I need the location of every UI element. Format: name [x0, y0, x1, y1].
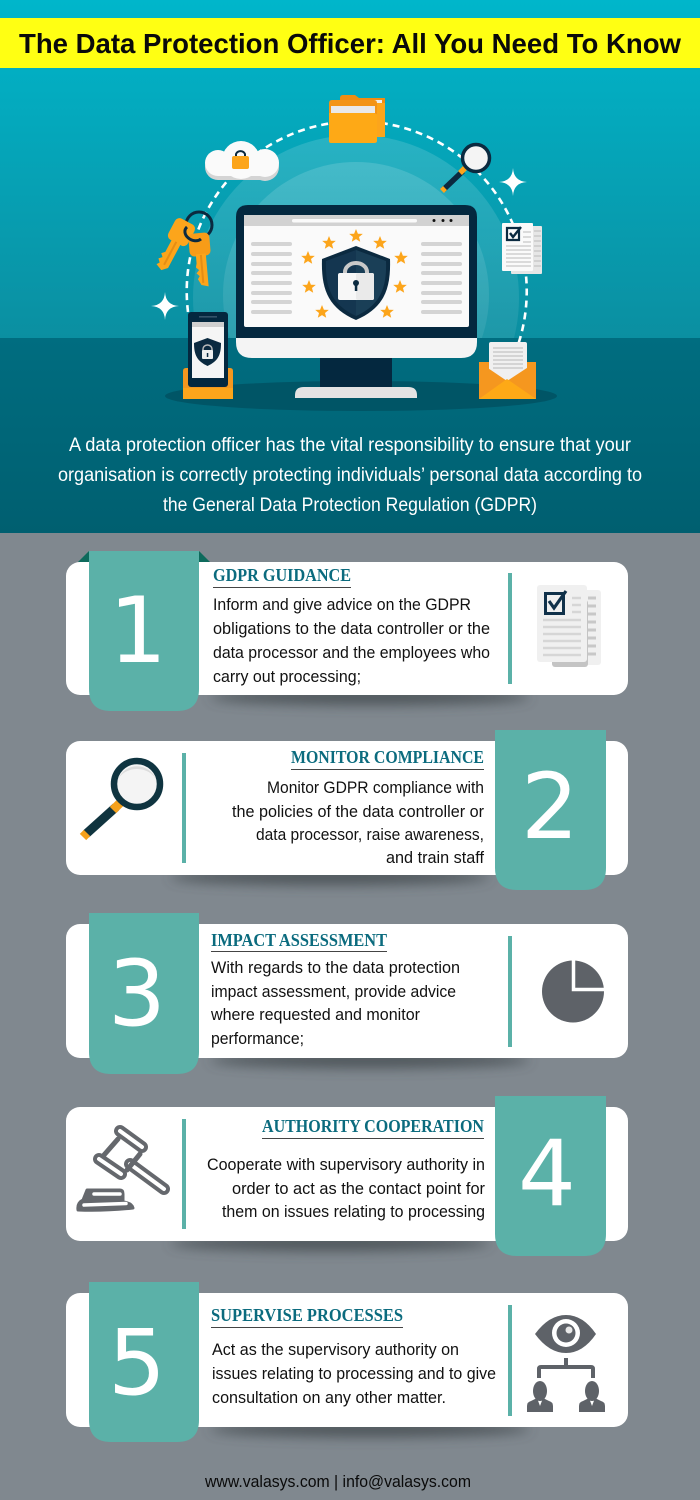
body text: data processor and the employees who — [213, 643, 490, 662]
number ribbon 2 — [495, 730, 606, 890]
icon: cloud with lock — [205, 141, 279, 181]
body text: Inform and give advice on the GDPR — [213, 595, 471, 614]
body text: Act as the supervisory authority on — [212, 1340, 459, 1359]
body text: consultation on any other matter. — [212, 1388, 446, 1407]
heading: IMPACT ASSESSMENT — [211, 930, 387, 950]
intro text — [58, 435, 642, 516]
body text — [210, 958, 460, 1048]
body text: the policies of the data controller or — [232, 802, 484, 821]
icon: checklist document — [502, 223, 542, 274]
body text: carry out processing; — [213, 667, 361, 686]
number ribbon 5 — [89, 1282, 199, 1442]
panel: monitor compliance — [66, 730, 628, 890]
body text: With regards to the data protection — [211, 958, 460, 977]
footer contact line: www.valasys.com | info@valasys.com — [204, 1472, 471, 1491]
heading: SUPERVISE PROCESSES — [211, 1305, 403, 1325]
body text: impact assessment, provide advice — [211, 982, 456, 1001]
number ribbon 1 — [89, 551, 199, 711]
icon: shield with padlock — [322, 246, 390, 320]
icon: checklist — [537, 585, 601, 667]
number ribbon 2: 2 — [521, 755, 579, 860]
title banner — [0, 18, 700, 68]
body text: Cooperate with supervisory authority in — [207, 1155, 485, 1174]
icon: magnifying glass — [442, 144, 490, 191]
intro text: A data protection officer has the vital responsibility to ensure that your — [69, 435, 632, 456]
title banner: The Data Protection Officer: All You Need To Know — [19, 28, 681, 59]
body text: order to act as the contact point for — [232, 1179, 485, 1198]
panel: authority cooperation — [66, 1096, 628, 1256]
number ribbon 1: 1 — [109, 579, 167, 684]
body text: performance; — [211, 1029, 304, 1048]
number ribbon 5: 5 — [108, 1311, 166, 1416]
body text: obligations to the data controller or the — [213, 619, 490, 638]
intro text: organisation is correctly protecting individuals’ personal data according to — [58, 465, 642, 486]
intro text: the General Data Protection Regulation (GDPR) — [163, 495, 537, 516]
heading: GDPR GUIDANCE — [213, 565, 351, 585]
icon: keys — [152, 212, 214, 288]
panel: impact assessment — [66, 913, 628, 1074]
body text: Monitor GDPR compliance with — [267, 778, 484, 797]
panel: GDPR guidance — [66, 551, 628, 711]
body text: them on issues relating to processing — [222, 1202, 485, 1221]
heading: MONITOR COMPLIANCE — [291, 747, 484, 767]
body text: data processor, raise awareness, — [256, 825, 484, 844]
icon: monitor — [236, 205, 477, 398]
icon: EU stars — [301, 229, 408, 318]
body text: and train staff — [386, 848, 484, 867]
hero illustration — [151, 95, 557, 411]
number ribbon 3 — [89, 913, 199, 1074]
body text: where requested and monitor — [210, 1005, 420, 1024]
header background — [0, 0, 700, 533]
number ribbon 4 — [495, 1096, 606, 1256]
body text — [212, 1340, 496, 1407]
number ribbon 3: 3 — [108, 942, 166, 1047]
icon: gavel — [78, 1131, 164, 1210]
number ribbon 4: 4 — [518, 1122, 576, 1227]
panel: supervise processes — [66, 1282, 628, 1442]
body text — [207, 1155, 485, 1221]
body text — [232, 778, 484, 867]
icon: magnifying glass — [83, 761, 160, 837]
icon: envelope — [479, 342, 536, 399]
icon: eye over org chart — [527, 1315, 605, 1412]
body text: issues relating to processing and to give — [212, 1364, 496, 1383]
icon: sparkles — [151, 168, 527, 320]
icon: phone on stand — [183, 312, 233, 399]
body text — [213, 595, 490, 686]
heading: AUTHORITY COOPERATION — [262, 1116, 484, 1136]
icon: pie chart — [542, 959, 606, 1022]
icon: folder — [329, 95, 385, 143]
